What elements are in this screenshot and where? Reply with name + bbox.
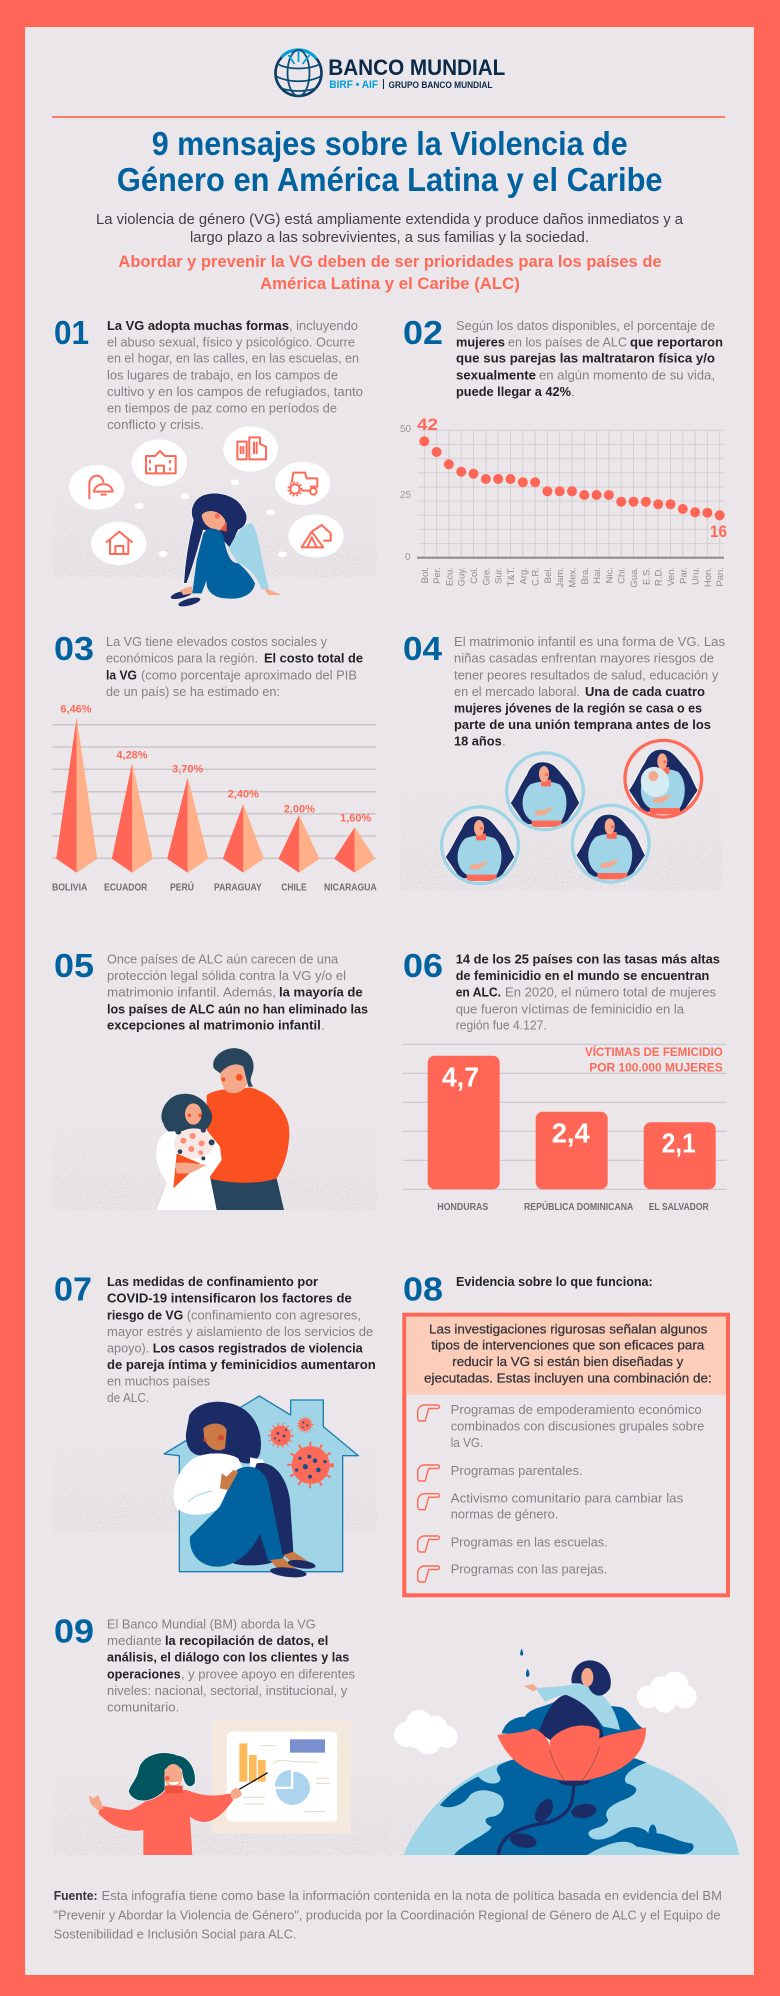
number 03: 03 [54, 630, 94, 667]
number 09: 09 [54, 1613, 94, 1650]
pyramid: Nicaragua: 1,60% [340, 812, 372, 824]
list item: Activismo comunitario para cambiar las [451, 1490, 684, 1505]
panel: 05 text: la mayoría de [279, 985, 363, 1000]
panel: 09 text: comunitario. [107, 1699, 179, 1714]
data points [419, 436, 725, 520]
pyramid: Perú: 3,70% [172, 764, 204, 776]
y axis labels: 0 [405, 552, 411, 563]
logo: Banco Mundial: BIRF • AIF [329, 79, 378, 91]
y axis labels [400, 424, 412, 563]
panel: 04 text: en el mercado laboral. [454, 684, 580, 699]
title: 9 mensajes sobre la Violencia de [152, 125, 628, 162]
icon: school [146, 451, 176, 473]
country labels: Nic. [604, 567, 615, 583]
panel: 02 text: en los países de ALC [508, 335, 627, 350]
number 01: 01 [54, 314, 89, 351]
intro text [96, 211, 684, 246]
bar: El Salvador: 2,1 [662, 1128, 696, 1159]
country labels: Uru. [691, 567, 702, 585]
bar: República Dominicana: 2,4 [552, 1118, 590, 1149]
country labels [420, 567, 726, 588]
panel: 04 text [403, 630, 725, 748]
source note: Sostenibilidad e Inclusión Social para ALC. [54, 1927, 297, 1942]
country labels: Arg. [518, 567, 529, 584]
panel: 07 text: en muchos países [107, 1373, 210, 1388]
bar: El Salvador: EL SALVADOR [649, 1202, 709, 1213]
panel: 07 text: apoyo). [107, 1340, 149, 1355]
panel: 04 text: tener peores resultados de salud, educación y [454, 667, 719, 682]
panel: 06 text: de feminicidio en el mundo se encuentran [456, 968, 709, 983]
list item: la VG. [451, 1435, 483, 1450]
panel: 02 text: Según los datos disponibles, el porcentaje de [456, 318, 715, 333]
source note: Fuente: [54, 1888, 98, 1903]
icon: virus large [290, 1444, 331, 1486]
chart: dot plot by country [400, 415, 727, 588]
bar: Honduras [428, 1056, 500, 1213]
country labels: ECUADOR [104, 883, 148, 894]
y axis labels: 25 [400, 490, 412, 501]
panel: 06 text: En 2020, el número total de mujeres [505, 985, 716, 1000]
panel: 06 text: región fue 4.127. [456, 1017, 547, 1032]
panel: 07 text: de ALC. [107, 1390, 149, 1405]
panel: 01 text: conflicto y crisis. [107, 417, 204, 432]
panel: 07 text: COVID-19 intensificaron los factores de [107, 1291, 352, 1306]
icon: virus small [298, 1417, 312, 1432]
list item [418, 1490, 684, 1522]
country labels: Gre. [481, 567, 492, 585]
icon: globe [276, 50, 322, 96]
figure: presenter [89, 1753, 268, 1855]
country labels: Ven. [666, 567, 677, 586]
pyramid: Perú [167, 764, 208, 873]
country labels: Ecu. [444, 567, 455, 586]
figure: seated woman [174, 1402, 316, 1579]
number 02: 02 [403, 314, 443, 351]
country labels: Mex. [568, 567, 578, 588]
illustration: woman on flower over globe [390, 1649, 739, 1855]
panel: 07 text: riesgo de VG [107, 1307, 183, 1322]
country labels: Col. [469, 567, 480, 584]
illustration: four women in circles [400, 740, 722, 890]
country labels: PERÚ [170, 881, 194, 894]
panel: 02 text: que sus parejas las maltrataron física y/o [456, 351, 715, 366]
illustration: woman and thought bubbles [53, 426, 377, 608]
icon: woman, blue ring [572, 805, 649, 882]
intro text: largo plazo a las sobrevivientes, a sus familias y la sociedad. [190, 229, 589, 246]
y axis labels: 50 [400, 424, 412, 435]
icon: virus medium [269, 1424, 292, 1447]
number 05: 05 [54, 947, 94, 984]
country labels: Bel. [543, 567, 554, 583]
country labels: Sur. [494, 567, 505, 584]
panel: 09 text: operaciones [107, 1666, 181, 1681]
chart legend title: VÍCTIMAS DE FEMICIDIO [585, 1044, 723, 1059]
icon: woman with baby, red ring [625, 740, 702, 817]
country labels: PARAGUAY [214, 883, 262, 894]
country labels: BOLIVIA [52, 883, 87, 894]
country labels: Bol. [420, 567, 431, 583]
box header: reducir la VG si están bien diseñadas y [452, 1354, 684, 1369]
source note: "Prevenir y Abordar la Violencia de Género", producida por la Coordinación Regional de Género de ALC y el Equipo de [54, 1907, 720, 1922]
subtitle [118, 253, 662, 293]
stem and leaves [498, 1781, 598, 1855]
flower [497, 1683, 646, 1781]
source note [54, 1888, 722, 1942]
icon: house [164, 1396, 358, 1572]
panel: 04 text: 18 años [454, 733, 502, 748]
panel: 01 text: La VG adopta muchas formas [107, 318, 289, 333]
number 06: 06 [403, 947, 443, 984]
source note: Esta infografía tiene como base la información contenida en la nota de política basada en evidencia del BM [102, 1888, 722, 1903]
country labels: Bra. [580, 567, 591, 584]
list item [418, 1562, 607, 1582]
panel: 01 text: en el hogar, en las calles, en las escuelas, en [107, 351, 359, 366]
icon: woman, blue ring [507, 753, 583, 830]
list item: Programas de empoderamiento económico [451, 1402, 702, 1417]
list item: Programas en las escuelas. [451, 1534, 608, 1549]
country labels: C.R. [531, 567, 542, 586]
icon: buildings [237, 437, 266, 459]
panel: 09 text [54, 1613, 355, 1714]
panel: 02 text: puede llegar a 42% [456, 384, 571, 399]
bar: Honduras: HONDURAS [437, 1202, 489, 1213]
list item: Programas con las parejas. [451, 1562, 607, 1577]
figure: girl with bouquet [156, 1094, 222, 1210]
panel: 02 text: sexualmente [456, 367, 536, 382]
bar: Honduras: 4,7 [442, 1062, 479, 1093]
panel: 05 text: matrimonio infantil. Además, [107, 985, 276, 1000]
panel: 07 text: mayor estrés y aislamiento de los servicios de [107, 1324, 373, 1339]
panel: 05 text: los países de ALC aún no han eliminado las [107, 1001, 368, 1016]
panel: 04 text: Una de cada cuatro [585, 684, 705, 699]
panel: 05 text: Once países de ALC aún carecen de una [107, 951, 339, 966]
panel: 06 text: en ALC. [456, 985, 501, 1000]
chart: femicide bars [403, 1044, 727, 1213]
panel: 01 text: cultivo y en los campos de refugiados, tanto [107, 384, 363, 399]
panel: 02 text: que reportaron [630, 335, 723, 350]
panel: 03 text: La VG tiene elevados costos sociales y [106, 634, 327, 649]
panel: 05 text: . [321, 1017, 325, 1032]
panel: 07 text: Las medidas de confinamiento por [107, 1274, 318, 1289]
country labels: Gua. [629, 567, 640, 588]
bar: El Salvador [644, 1122, 716, 1213]
country labels: NICARAGUA [324, 883, 377, 894]
number 07: 07 [54, 1271, 92, 1308]
number 04: 04 [403, 630, 443, 667]
panel: 04 text: mujeres jóvenes de la región se casa o es [454, 700, 702, 715]
title [117, 125, 663, 198]
pyramid: Paraguay [223, 789, 264, 873]
pyramid: Nicaragua [334, 812, 375, 873]
panel: 01 text: los lugares de trabajo, en los campos de [107, 367, 338, 382]
logo: Banco Mundial [276, 50, 505, 96]
panel: 02 text: . [571, 384, 575, 399]
chart legend title [585, 1044, 723, 1074]
list item: normas de género. [451, 1507, 558, 1522]
panel: 09 text: El Banco Mundial (BM) aborda la VG [107, 1616, 316, 1631]
panel: 02 text: mujeres [456, 335, 505, 350]
country labels: Jam. [555, 567, 566, 588]
icon: street lamp [89, 476, 113, 499]
icon: woman, blue ring [442, 807, 518, 884]
list item [418, 1534, 608, 1552]
figure: woman head and hand [520, 1649, 611, 1696]
illustration: man and girl with bouquet [53, 1048, 377, 1210]
value label 42: 42 [417, 415, 438, 434]
panel: 03 text: de un país) se ha estimado en: [106, 684, 280, 699]
panel: 08 heading: Evidencia sobre lo que funciona: [456, 1274, 653, 1289]
title: Género en América Latina y el Caribe [117, 161, 663, 198]
illustration: presenter and board [53, 1720, 390, 1855]
subtitle: Abordar y prevenir la VG deben de ser prioridades para los países de [118, 253, 662, 271]
country labels: Guy. [457, 567, 468, 586]
box header [406, 1317, 726, 1395]
list item: combinados con discusiones grupales sobre [451, 1418, 704, 1433]
panel: 02 text [403, 314, 723, 399]
pyramid: Paraguay: 2,40% [228, 789, 259, 801]
figure: man [207, 1048, 289, 1210]
country labels: Chi. [617, 567, 628, 584]
country labels: Par. [678, 567, 689, 584]
panel: 04 text: parte de una unión temprana antes de los [454, 717, 711, 732]
panel: 09 text: niveles: nacional, sectorial, institucional, y [107, 1683, 348, 1698]
panel: 09 text: mediante [107, 1633, 162, 1648]
bar: República Dominicana [524, 1112, 633, 1213]
number 08: 08 [403, 1271, 443, 1308]
country labels: Pan. [715, 567, 726, 587]
intro text: La violencia de género (VG) está ampliamente extendida y produce daños inmediatos y a [96, 211, 684, 228]
panel: 06 text [403, 947, 720, 1032]
pyramid: Ecuador: 4,28% [116, 749, 148, 761]
panel: 04 text: El matrimonio infantil es una forma de VG. Las [454, 634, 725, 649]
pyramid: Chile: 2,00% [284, 803, 315, 815]
panel: 09 text: , y provee apoyo en diferentes [181, 1666, 355, 1681]
illustration: woman in house with virus [53, 1396, 377, 1579]
panel: 07 text: Los casos registrados de violencia [153, 1340, 363, 1355]
panel: 07 text: (confinamiento con agresores, [187, 1307, 361, 1322]
chart legend title: POR 100.000 MUJERES [589, 1060, 723, 1074]
pyramid: Bolivia [56, 704, 97, 873]
panel: 04 text: niñas casadas enfrentan mayores riesgos de [454, 651, 714, 666]
panel: 02 text: en algún momento de su vida, [539, 367, 715, 382]
chart: cost pyramids [52, 704, 377, 894]
box header: Las investigaciones rigurosas señalan algunos [429, 1321, 708, 1336]
pyramid: Bolivia: 6,46% [60, 704, 92, 716]
panel: 03 text: El costo total de [264, 651, 363, 666]
country labels: Per. [432, 567, 443, 584]
bar: República Dominicana: REPÚBLICA DOMINICANA [524, 1200, 633, 1213]
panel: 08 heading [403, 1271, 653, 1308]
panel: 09 text: análisis, el diálogo con los clientes y las [107, 1650, 349, 1665]
subtitle: América Latina y el Caribe (ALC) [260, 275, 520, 293]
clouds [394, 1672, 697, 1754]
panel: 09 text: la recopilación de datos, el [165, 1633, 328, 1648]
panel: 01 text [54, 314, 363, 432]
icon: tractor [292, 473, 317, 491]
panel: 08 box [404, 1315, 728, 1595]
panel: 06 text: 14 de los 25 países con las tasas más altas [456, 951, 720, 966]
panel: 01 text: en tiempos de paz como en períodos de [107, 400, 337, 415]
box header: tipos de intervenciones que son eficaces para [431, 1337, 705, 1352]
country labels: E.S. [641, 567, 652, 585]
globe [403, 1758, 739, 1855]
icon: house [106, 532, 133, 554]
panel: 05 text [54, 947, 368, 1032]
country labels [52, 881, 377, 894]
list item: Programas parentales. [451, 1463, 583, 1478]
list item [418, 1463, 583, 1481]
panel: 01 text: , incluyendo [289, 318, 358, 333]
panel: 06 text: que fueron víctimas de feminicidio en la [456, 1001, 685, 1016]
value label 16: 16 [710, 522, 727, 541]
box header: ejecutadas. Estas incluyen una combinación de: [424, 1371, 712, 1386]
country labels: T&T. [506, 567, 517, 587]
figure: seated woman [170, 493, 282, 608]
panel: 03 text: económicos para la región. [106, 651, 258, 666]
panel: 07 text [54, 1271, 376, 1405]
panel: 04 text: . [502, 733, 506, 748]
pyramid: Chile [278, 803, 320, 873]
pyramid: Ecuador [112, 749, 153, 873]
presentation board [212, 1720, 351, 1833]
logo: Banco Mundial: GRUPO BANCO MUNDIAL [388, 80, 493, 90]
panel: 03 text: la VG [106, 667, 137, 682]
country labels: Hai. [592, 567, 603, 584]
panel: 03 text [54, 630, 363, 699]
panel: 03 text: (como porcentaje aproximado del PIB [141, 667, 357, 682]
country labels: CHILE [281, 883, 307, 894]
logo: Banco Mundial: BANCO MUNDIAL [328, 55, 505, 80]
country labels: R.D. [654, 567, 665, 586]
country labels: Hon. [703, 567, 714, 587]
panel: 01 text: el abuso sexual, físico y psicológico. Ocurre [107, 335, 355, 350]
panel: 07 text: de pareja íntima y feminicidios aumentaron [107, 1357, 376, 1372]
icon: tent [302, 525, 331, 547]
list item [418, 1402, 704, 1450]
panel: 05 text: protección legal sólida contra la VG y/o el [107, 968, 346, 983]
panel: 05 text: excepciones al matrimonio infantil [107, 1017, 321, 1032]
